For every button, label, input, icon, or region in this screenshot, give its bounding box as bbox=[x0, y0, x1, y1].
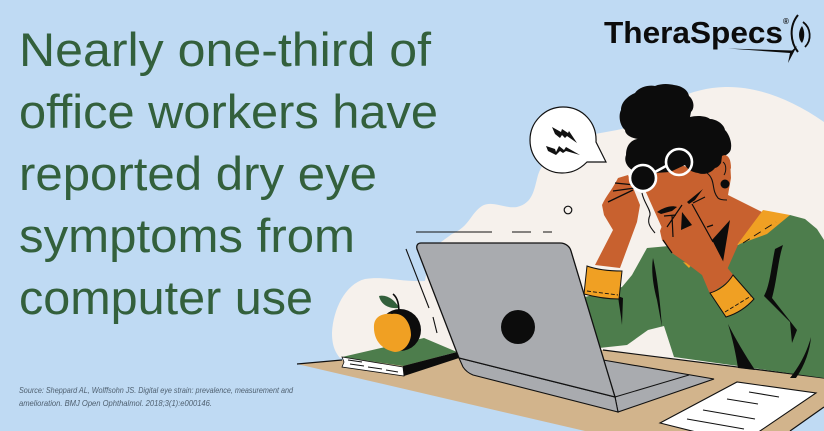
sweater bbox=[585, 215, 824, 378]
face line details bbox=[663, 197, 713, 253]
hair bbox=[620, 84, 731, 176]
laptop bbox=[417, 243, 714, 412]
right forearm and hand bbox=[660, 202, 735, 294]
left forearm and hand bbox=[595, 175, 640, 268]
apple bbox=[374, 294, 421, 352]
source citation: Source: Sheppard AL, Wolffsohn JS. Digital eye strain: prevalence, measurement and bbox=[19, 385, 293, 395]
speech bubble with lightning bolts bbox=[530, 107, 606, 173]
loose hair strands bbox=[642, 173, 727, 233]
neckline shadow bbox=[712, 220, 730, 262]
headline: computer use bbox=[19, 271, 313, 324]
headline: reported dry eye bbox=[19, 147, 377, 200]
laptop lid bbox=[417, 243, 615, 397]
headline: office workers have bbox=[19, 85, 438, 138]
collar bbox=[737, 210, 790, 245]
nose shadow bbox=[681, 212, 692, 230]
right cuff bbox=[710, 275, 754, 317]
orange under hand bbox=[683, 262, 692, 268]
eyebrows bbox=[657, 189, 703, 214]
woman bbox=[584, 84, 824, 378]
logo: TheraSpecs: ® bbox=[783, 17, 789, 26]
paper on desk bbox=[660, 382, 816, 431]
source citation: amelioration. BMJ Open Ophthalmol. 2018;3(1):e000146. bbox=[19, 398, 212, 408]
desk bbox=[297, 350, 824, 431]
left cuff bbox=[584, 266, 622, 299]
ear and earring bbox=[720, 155, 731, 188]
headline bbox=[19, 23, 438, 324]
logo: TheraSpecs: TheraSpecs bbox=[604, 15, 783, 50]
lid logo circle bbox=[501, 310, 535, 344]
neck and face bbox=[645, 156, 762, 272]
background blob bbox=[332, 87, 824, 382]
logo: TheraSpecs bbox=[604, 15, 810, 63]
motion lines bbox=[406, 232, 552, 333]
laptop front edge bbox=[459, 358, 618, 412]
headline: symptoms from bbox=[19, 209, 355, 262]
book bbox=[342, 338, 459, 376]
source citation bbox=[19, 385, 293, 408]
glasses bbox=[630, 149, 692, 191]
headline: Nearly one-third of bbox=[19, 23, 432, 76]
left hand finger lines bbox=[608, 183, 635, 202]
sweater shadows bbox=[618, 245, 811, 378]
small circle bbox=[564, 206, 572, 214]
laptop base bbox=[603, 360, 714, 412]
